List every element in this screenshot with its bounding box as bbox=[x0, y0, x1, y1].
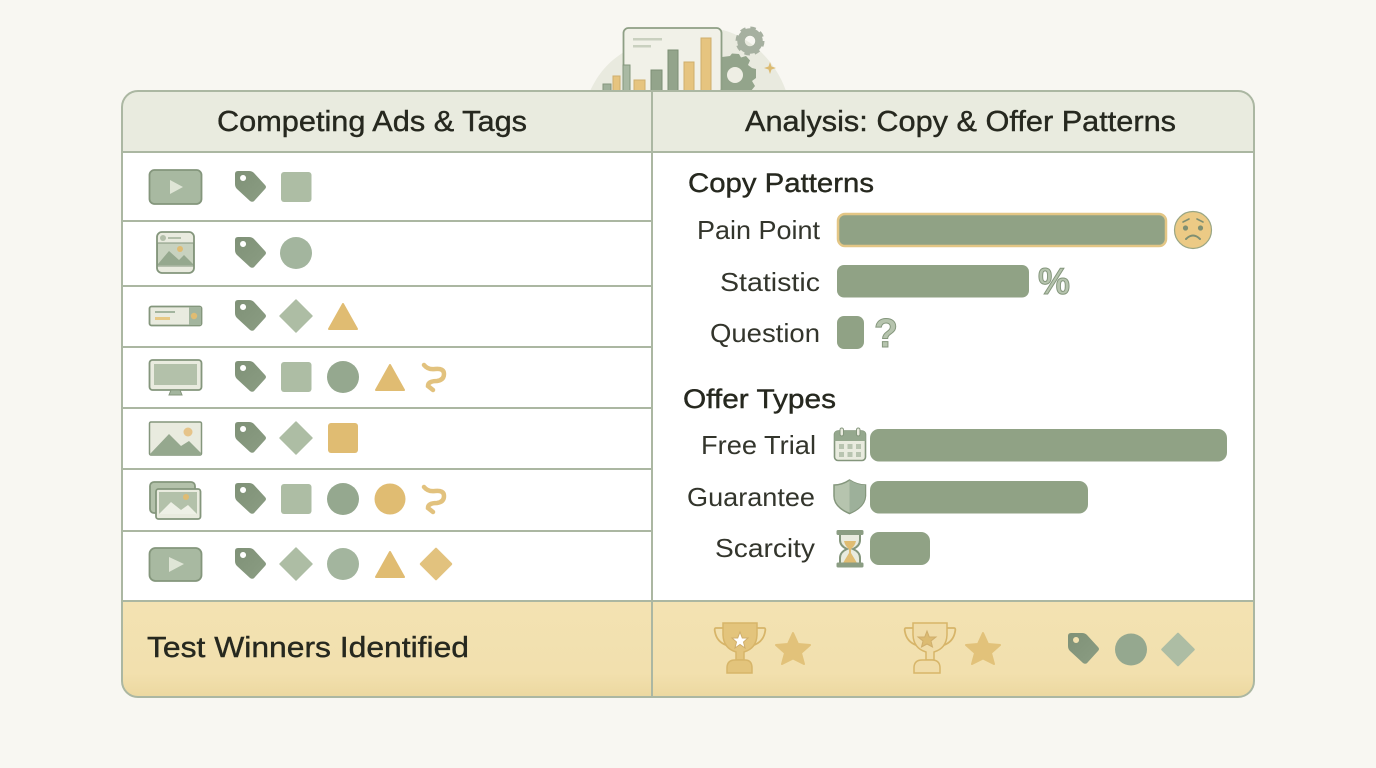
icon: circle bbox=[1115, 634, 1147, 666]
row 4: desktop display ad with tags bbox=[150, 360, 444, 395]
section: offer types bbox=[683, 384, 1227, 568]
table panel bbox=[122, 91, 1254, 697]
icon: hourglass bbox=[836, 530, 864, 568]
label: statistic: Statistic bbox=[720, 267, 820, 297]
label: free trial: Free Trial bbox=[701, 430, 816, 460]
icon: question mark: ? bbox=[874, 310, 898, 356]
heading: offer types: Offer Types bbox=[683, 384, 836, 414]
row 2: social post ad with tags bbox=[157, 232, 312, 273]
row 1: video ad with tags bbox=[150, 170, 312, 204]
bar: guarantee bbox=[870, 481, 1088, 514]
bar: scarcity bbox=[870, 532, 930, 565]
icon: gold star bbox=[776, 633, 810, 664]
icon: gold star bbox=[966, 633, 1000, 664]
row 5: image ad with tags bbox=[150, 422, 358, 455]
heading: analysis: Analysis: Copy & Offer Patterns bbox=[745, 106, 1176, 138]
heading: copy patterns: Copy Patterns bbox=[688, 168, 874, 198]
label: guarantee: Guarantee bbox=[687, 482, 815, 512]
label: scarcity: Scarcity bbox=[715, 533, 815, 563]
footer label: test winners identified: Test Winners Identified bbox=[147, 632, 469, 664]
bar: question bbox=[837, 316, 864, 349]
bar: pain point bbox=[838, 214, 1166, 246]
icon: gold trophy bbox=[715, 623, 765, 673]
row 3: banner ad with tags bbox=[150, 300, 357, 332]
label: question: Question bbox=[710, 318, 820, 348]
icon: outline trophy bbox=[905, 623, 955, 673]
bar: statistic bbox=[837, 265, 1029, 298]
heading: competing ads and tags: Competing Ads & Tags bbox=[217, 106, 527, 138]
illustration: dashboard with bars and gears bbox=[590, 28, 786, 94]
icon: diamond bbox=[1162, 634, 1194, 665]
section: copy patterns bbox=[688, 168, 1212, 356]
footer: winners icons bbox=[715, 623, 1194, 673]
bar: free trial bbox=[870, 429, 1227, 462]
icon: calendar bbox=[834, 428, 866, 460]
icon: worried face bbox=[1174, 212, 1212, 248]
icon: tag bbox=[1068, 633, 1099, 664]
icon: shield bbox=[834, 480, 866, 514]
row 7: video ad with tags bbox=[150, 548, 451, 581]
label: pain point: Pain Point bbox=[697, 215, 821, 245]
icon: percent: % bbox=[1038, 261, 1070, 302]
row 6: carousel ad with tags bbox=[150, 482, 444, 519]
